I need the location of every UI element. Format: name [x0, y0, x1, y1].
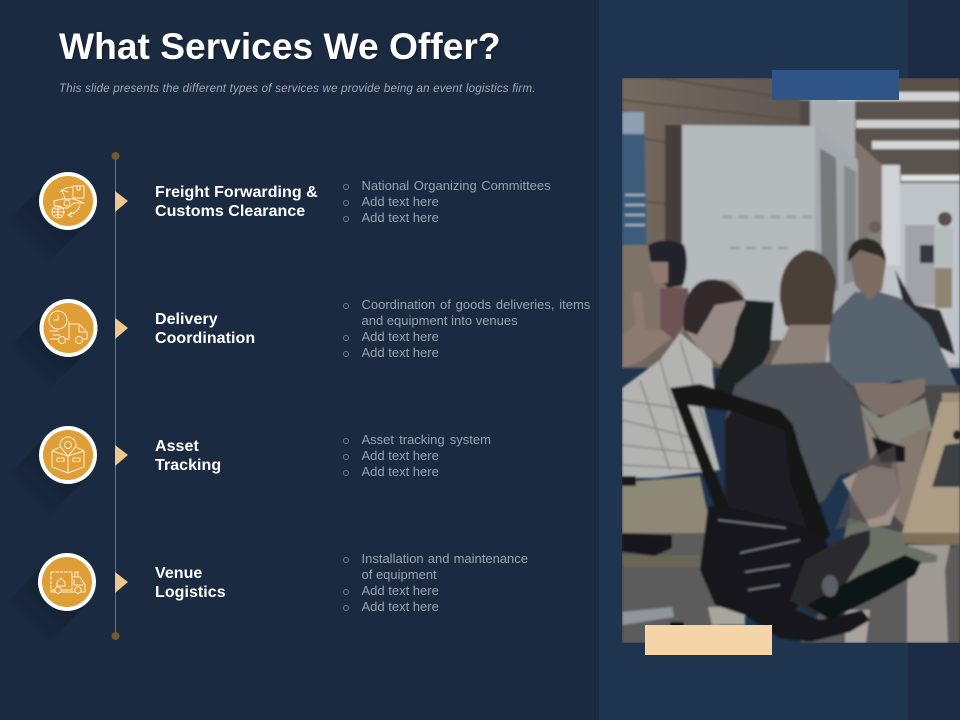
blue poster	[622, 110, 647, 245]
seated chair back behind striped man	[712, 300, 774, 395]
office chair	[670, 384, 921, 642]
heading: asset tracking	[155, 438, 221, 474]
list: freight forwarding: National Organizing Committees	[362, 178, 551, 193]
list: venue logistics: Add text here	[362, 583, 439, 598]
right leg	[907, 545, 950, 643]
pale trouser leg at chair foot	[708, 607, 745, 625]
arrow 3	[115, 445, 128, 466]
service icons	[26, 172, 98, 624]
list: delivery coordination: Add text here	[362, 345, 439, 360]
list: delivery coordination	[343, 297, 590, 360]
timeline	[112, 152, 128, 640]
right background panel	[599, 0, 908, 720]
far right background strip	[908, 0, 960, 720]
arrow 4	[115, 572, 128, 593]
glass partition panels	[815, 126, 858, 330]
list: venue logistics: of equipment	[362, 567, 437, 582]
list: delivery coordination: Add text here	[362, 329, 439, 344]
heading: delivery coordination: Coordination	[155, 330, 255, 347]
list: delivery coordination: Coordination of goods deliveries, items	[362, 297, 590, 312]
list: venue logistics: Installation and maintenance	[362, 551, 528, 566]
list: delivery coordination: and equipment into venues	[362, 313, 518, 328]
heading: freight forwarding	[155, 184, 318, 220]
man from behind	[725, 250, 900, 530]
list: freight forwarding: Add text here	[362, 194, 439, 209]
list: asset tracking: Add text here	[362, 448, 439, 463]
heading: asset tracking: Tracking	[155, 457, 221, 474]
heading: venue logistics	[155, 565, 226, 601]
photo: team meeting in an office	[622, 78, 960, 643]
list: freight forwarding	[343, 178, 551, 225]
arrow 2	[115, 318, 128, 339]
list: asset tracking	[343, 432, 491, 479]
person in maroon shirt	[622, 240, 690, 368]
list: asset tracking: Asset tracking system	[362, 432, 491, 447]
icon: plane, parcel and globe	[8, 172, 97, 262]
icon: venue logistics truck	[7, 553, 96, 643]
standing person in background	[934, 212, 953, 308]
heading: delivery coordination: Delivery	[155, 311, 218, 328]
facing man	[827, 238, 957, 392]
striped shirt man	[622, 279, 745, 556]
wood wall	[622, 78, 812, 368]
list: asset tracking: Add text here	[362, 464, 439, 479]
heading: venue logistics: Venue	[155, 565, 202, 582]
heading: freight forwarding: Freight Forwarding &	[155, 184, 318, 201]
icon: clock and delivery truck	[8, 299, 98, 389]
table	[902, 393, 960, 545]
heading: delivery coordination	[155, 311, 255, 347]
ceiling and far room	[800, 78, 960, 368]
icon: box with location pin	[8, 426, 97, 516]
heading: venue logistics: Logistics	[155, 584, 226, 601]
subtitle: This slide presents the different types of services we provide being an event logistics firm.	[59, 83, 536, 95]
distant person and office chairs	[869, 221, 881, 233]
whiteboard	[682, 125, 815, 340]
title: What Services We Offer?	[59, 25, 501, 67]
list: freight forwarding: Add text here	[362, 210, 439, 225]
heading: freight forwarding: Customs Clearance	[155, 203, 305, 220]
carpet	[622, 533, 720, 643]
pillar above whiteboard	[800, 100, 810, 126]
cream accent rectangle	[645, 625, 772, 655]
hands and beige shorts	[850, 378, 960, 565]
blue accent rectangle	[772, 70, 899, 100]
arrow 1	[115, 191, 128, 212]
list: venue logistics	[343, 551, 528, 614]
heading: asset tracking: Asset	[155, 438, 199, 455]
list: venue logistics: Add text here	[362, 599, 439, 614]
green shorts	[835, 518, 937, 590]
